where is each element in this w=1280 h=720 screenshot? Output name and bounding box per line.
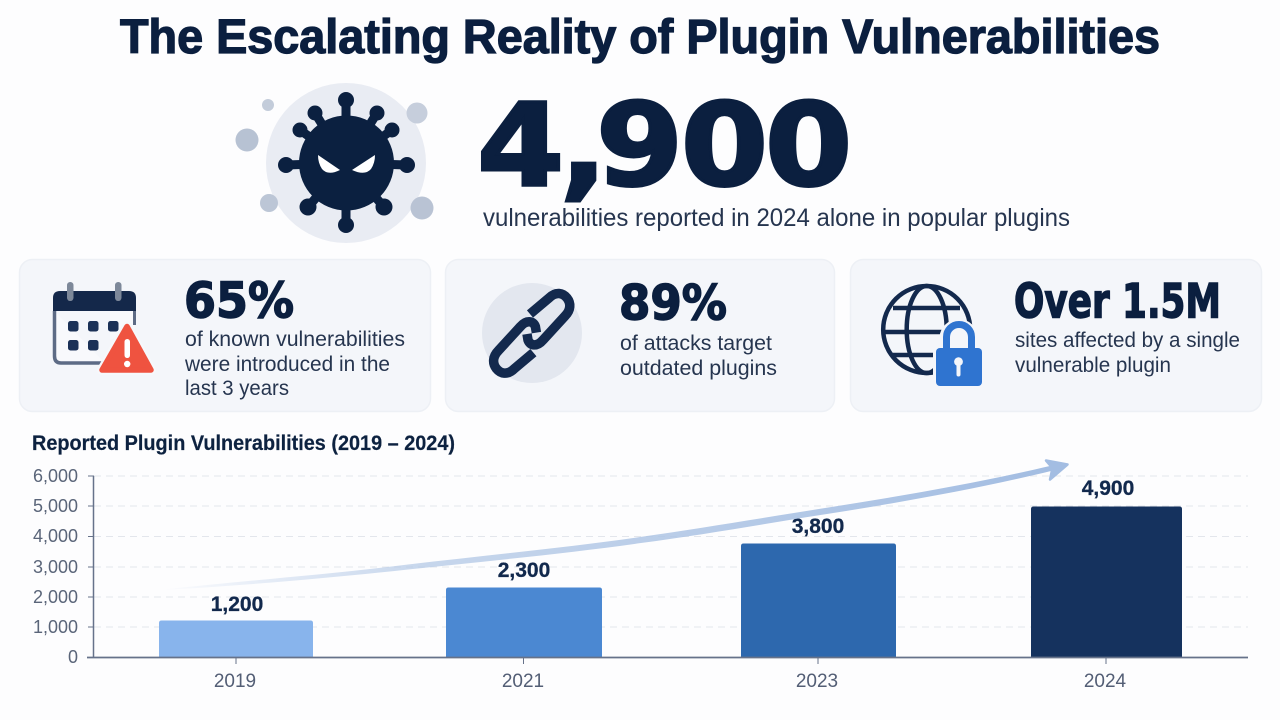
bar value labels: 1,200 [211,593,263,616]
stat description: last 3 years [185,377,289,400]
arrow: upward trend [160,460,1068,590]
stat description: of attacks target [620,332,772,355]
y axis labels: 5,000 [33,496,78,516]
title: The Escalating Reality of Plugin Vulnerabilities [120,11,1160,64]
bars [159,506,1182,658]
stat value: 65% [184,272,294,330]
bar value labels: 2,300 [498,559,550,582]
headline description: vulnerabilities reported in 2024 alone in popular plugins [483,204,1070,232]
stat description: sites affected by a single [1015,329,1240,352]
x axis labels [214,671,1127,692]
bar value labels: 4,900 [1082,477,1134,500]
stat description [184,328,405,400]
bar chart [33,466,1248,692]
bar value labels: 3,800 [792,515,844,538]
stat value: Over 1.5M [1014,274,1221,330]
panel: 1.5M stat [850,260,1262,412]
y axis labels: 2,000 [33,587,78,607]
bar value labels [211,477,1134,616]
x axis labels: 2023 [796,671,838,692]
y axis labels: 1,000 [33,617,78,637]
icon: globe with padlock [883,286,986,390]
stat value: 89% [619,276,727,332]
stat description: vulnerable plugin [1015,354,1171,377]
stat description [620,332,777,380]
y axis labels: 6,000 [33,466,78,486]
panel: 65% stat [20,260,430,412]
icon: calendar with warning [53,282,151,370]
stat description: were introduced in the [184,353,390,376]
x axis labels: 2021 [502,671,544,692]
stat description [1015,329,1240,377]
icon: chain link [482,283,582,383]
y axis labels: 0 [68,647,78,667]
stat description: of known vulnerabilities [185,328,405,351]
chart heading: Reported Plugin Vulnerabilities (2019 – 2024) [32,432,455,455]
panel: 89% stat [446,260,834,412]
y axis labels: 4,000 [33,526,78,546]
y axis labels [33,466,78,667]
x axis labels: 2019 [214,671,256,692]
stat description: outdated plugins [620,357,777,380]
y axis labels: 3,000 [33,557,78,577]
axes [87,476,1248,664]
big number: 4,900 [477,80,852,213]
icon: virus [236,83,434,243]
x axis labels: 2024 [1084,671,1127,692]
